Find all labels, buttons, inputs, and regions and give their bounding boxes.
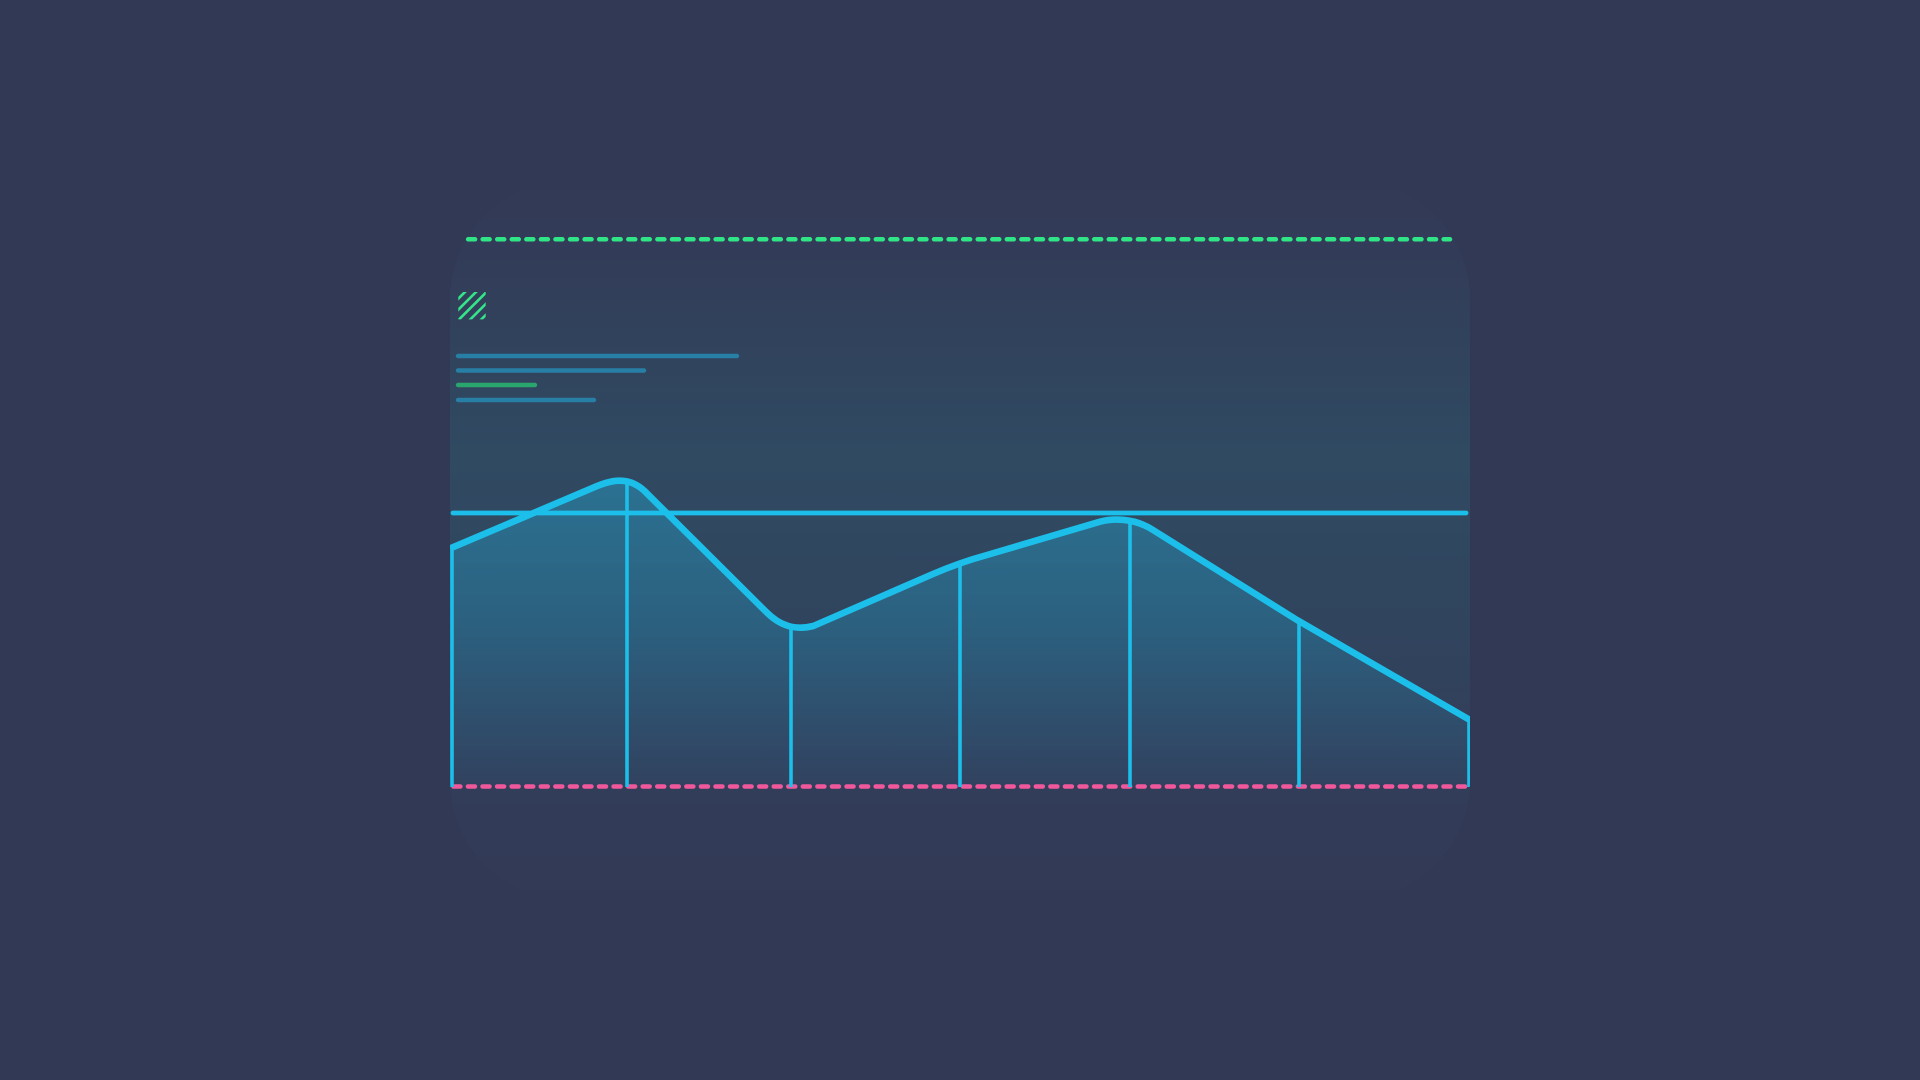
panel: chart card [450, 180, 1470, 900]
drop line 1 [450, 548, 454, 787]
legend line 2 [458, 368, 644, 373]
drop line 6 [1297, 621, 1301, 787]
upper limit dashed line [468, 237, 1450, 242]
drop line 4 [958, 563, 962, 787]
curve line [450, 481, 1470, 720]
legend line 3 (green) [458, 383, 535, 387]
area fill under curve [450, 481, 1470, 786]
drop line 3 [789, 627, 793, 787]
icon: hatched legend swatch [458, 292, 486, 320]
drop line 7 [1467, 720, 1470, 787]
legend line 4 [458, 398, 594, 402]
vertical drop lines [452, 481, 1469, 787]
area chart [450, 481, 1470, 787]
drop line 2 [625, 481, 629, 787]
legend text placeholder lines [458, 356, 737, 400]
drop line 5 [1128, 520, 1132, 787]
threshold horizontal line [453, 511, 1466, 515]
infographic canvas [450, 237, 1470, 789]
legend line 1 [458, 354, 737, 358]
lower limit dashed line [453, 784, 1468, 789]
